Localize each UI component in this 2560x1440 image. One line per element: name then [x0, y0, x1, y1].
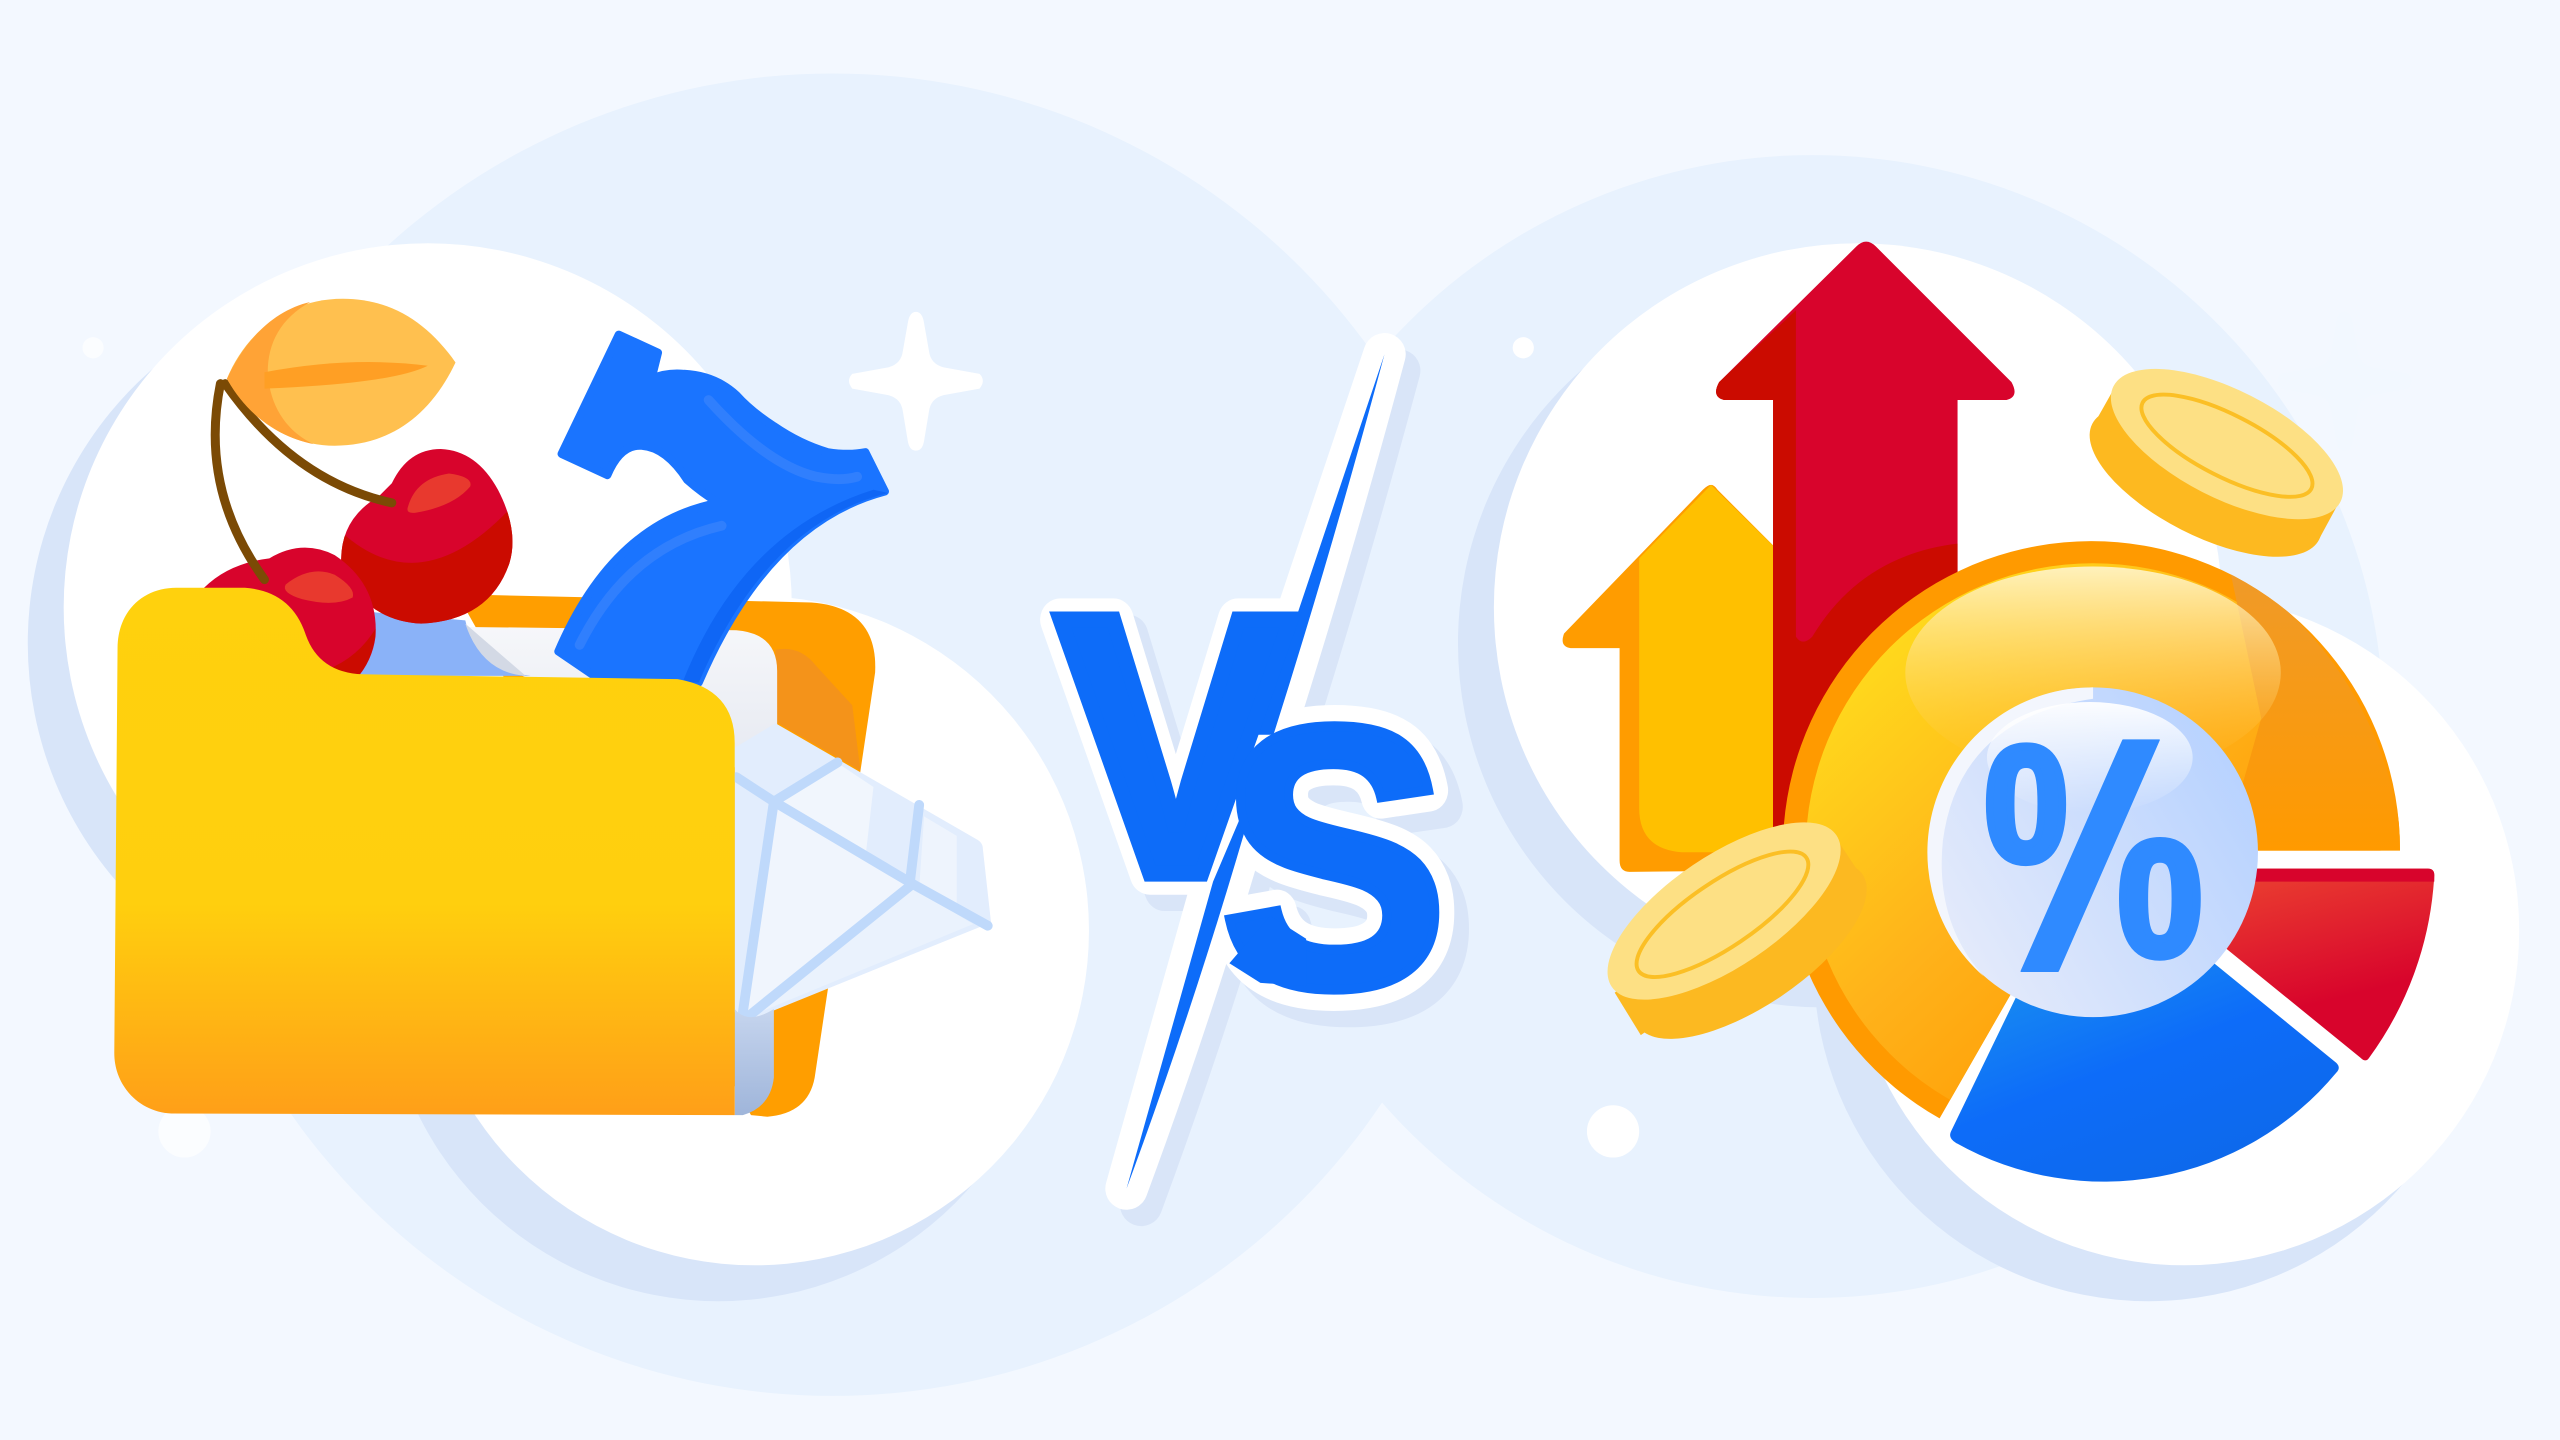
- letters and lightning: V: [1058, 540, 1295, 952]
- letters and lightning: S: [1220, 649, 1448, 1065]
- right backdrop circles: [1458, 243, 2519, 1301]
- percent sign: 0: [1984, 712, 2069, 895]
- percent sign: 0: [2117, 807, 2203, 990]
- versus badge: [1058, 354, 1463, 1205]
- red arrow: [1716, 242, 2015, 914]
- white paper: [467, 627, 777, 767]
- red sector: [2204, 869, 2434, 1060]
- badge outline: V: [1058, 540, 1295, 952]
- ring inner gradient: [1806, 563, 2403, 1138]
- badge outline: [1058, 354, 1448, 1189]
- badge outline: S: [1220, 649, 1448, 1065]
- folder illustration: [114, 299, 991, 1117]
- leaf: [227, 299, 456, 446]
- percent sign: /: [2003, 684, 2177, 1031]
- top coin: [2068, 338, 2365, 587]
- glass percent bubble: [1927, 684, 2258, 1031]
- folder back: [457, 594, 875, 1117]
- diamond: [735, 723, 991, 1020]
- bottom coin: [1581, 789, 1894, 1072]
- badge shadow: V: [1073, 557, 1309, 969]
- folder front: [114, 588, 735, 1115]
- blue sector: [1950, 955, 2339, 1182]
- sparkles and dots: [82, 312, 2411, 1158]
- blue paper: [356, 612, 531, 676]
- orange ring sector: [1783, 541, 2403, 1138]
- paper shadow: [465, 624, 526, 676]
- growth chart illustration: [1563, 242, 2434, 1182]
- badge shadow: [1073, 371, 1463, 1205]
- front cherry: [196, 548, 376, 679]
- back cherry: [341, 449, 512, 624]
- letters and lightning: [1058, 354, 1448, 1189]
- badge shadow: S: [1234, 665, 1463, 1081]
- left backdrop circles: [28, 243, 1089, 1301]
- seven symbol: [558, 335, 888, 682]
- cherry stems: [215, 384, 392, 580]
- grey folder fold: [735, 1009, 774, 1115]
- background blobs: [171, 73, 2384, 1396]
- folder back shadow: [776, 649, 860, 771]
- yellow arrow: [1563, 485, 1796, 872]
